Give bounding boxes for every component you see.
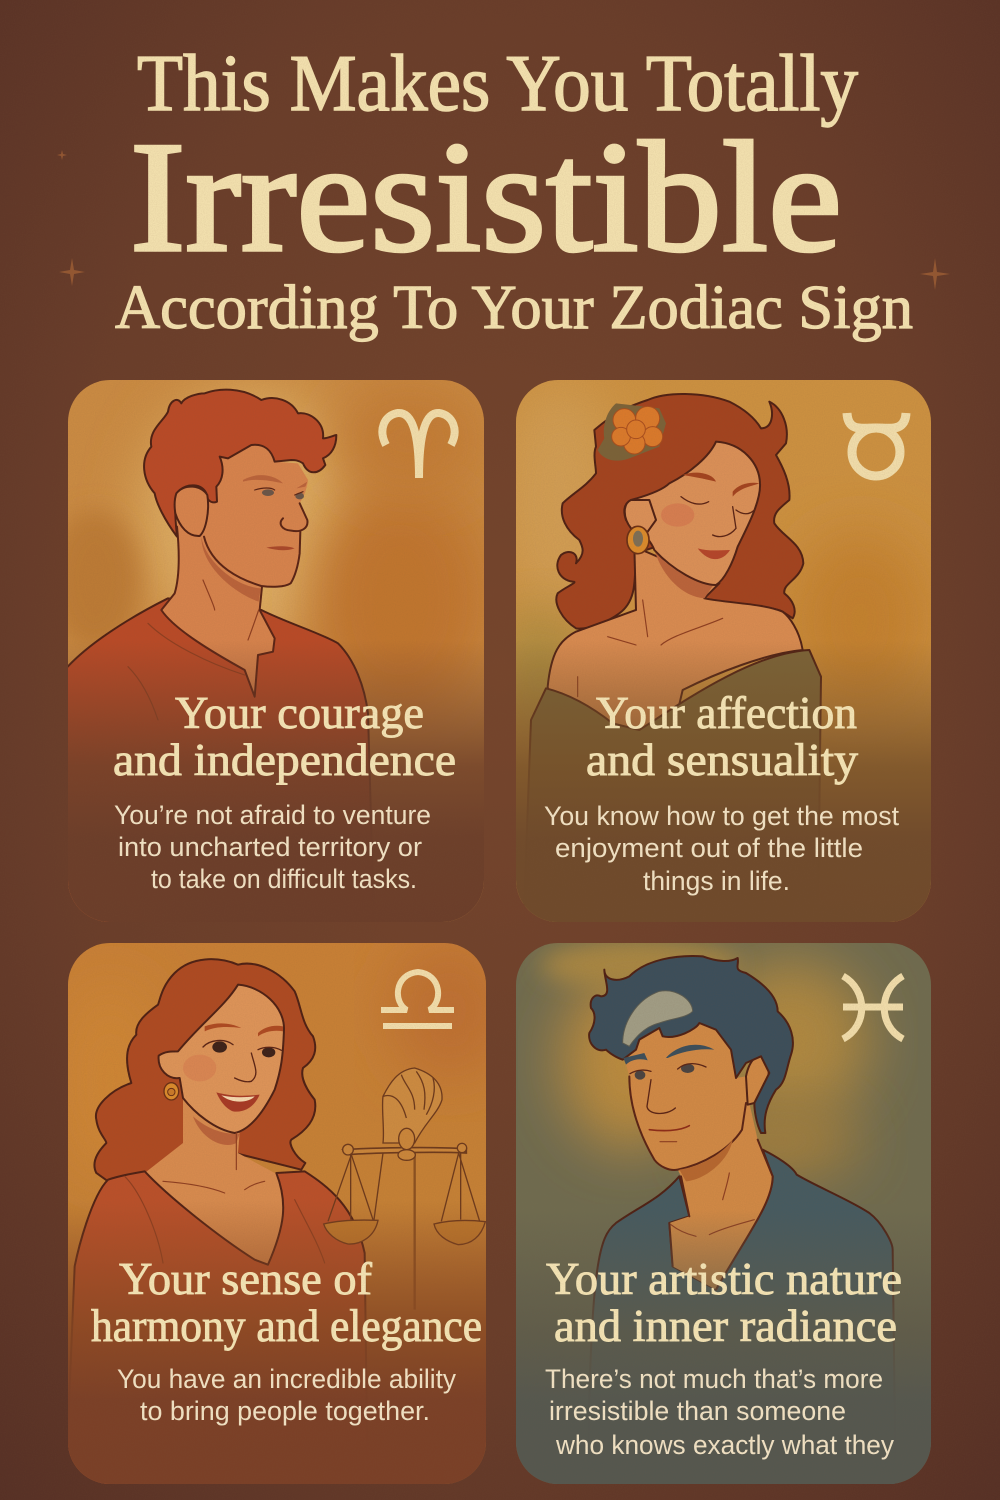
text: Taurus: things in life. [643, 866, 790, 896]
text: Aries: You’re not afraid to venture [114, 800, 431, 830]
text: Libra: You have an incredible ability [117, 1364, 456, 1394]
text: Taurus: enjoyment out of the little [555, 833, 863, 863]
title: According To Your Zodiac Sign [115, 274, 913, 342]
text: Pisces: There’s not much that’s more [545, 1364, 883, 1394]
panel: Taurus [490, 380, 931, 947]
icon: Aries glyph [382, 413, 455, 478]
illustration: man with curly red hair [65, 390, 375, 947]
title: Irresistible [130, 110, 842, 285]
text: Taurus: You know how to get the most [544, 801, 899, 831]
text: Aries: to take on difficult tasks. [151, 864, 417, 894]
decorative stars [57, 150, 950, 290]
heading: Taurus: and sensuality [586, 735, 859, 785]
text: Libra: to bring people together. [140, 1396, 430, 1426]
icon: Taurus glyph [847, 413, 906, 476]
heading: Aries [113, 688, 456, 785]
text backdrop [68, 640, 484, 922]
illustration: woman with flower in hair [523, 394, 821, 947]
text backdrop [516, 1210, 931, 1484]
panel: Pisces [516, 940, 931, 1500]
heading: Libra [91, 1254, 482, 1351]
text: Pisces [545, 1364, 894, 1460]
title [115, 40, 913, 342]
heading: Pisces [546, 1254, 902, 1351]
icon: Pisces glyph [843, 976, 903, 1039]
illustration: woman holding scales [65, 959, 485, 1500]
illustration: man with dark blue hair [588, 956, 896, 1500]
title: This Makes You Totally [137, 40, 858, 128]
hand and scales [324, 1068, 485, 1310]
text: Pisces: who knows exactly what they [555, 1430, 894, 1460]
panel: Aries [50, 380, 490, 947]
text: Pisces: irresistible than someone [549, 1396, 846, 1426]
text: Aries [114, 800, 431, 894]
text backdrop [516, 640, 931, 922]
text backdrop [68, 1200, 486, 1484]
heading: Libra: Your sense of [119, 1254, 372, 1304]
heading: Taurus [586, 688, 859, 785]
text: Taurus [544, 801, 899, 896]
heading: Libra: harmony and elegance [91, 1301, 482, 1351]
heading: Aries: Your courage [175, 688, 424, 738]
panel: Libra [68, 943, 486, 1484]
text: Aries: into uncharted territory or [118, 832, 422, 862]
heading: Pisces: and inner radiance [554, 1301, 897, 1351]
text: Libra [117, 1364, 456, 1426]
heading: Aries: and independence [113, 735, 456, 785]
heading: Taurus: Your affection [596, 688, 857, 738]
icon: Libra glyph [381, 972, 454, 1026]
heading: Pisces: Your artistic nature [546, 1254, 902, 1304]
